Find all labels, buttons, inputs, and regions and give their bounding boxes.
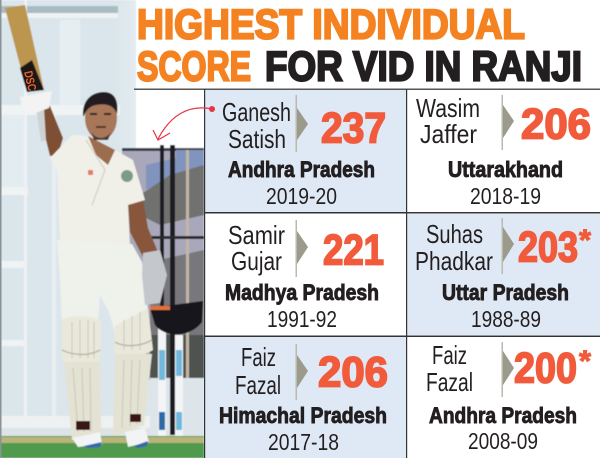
right arm	[128, 200, 158, 257]
shoes	[72, 432, 102, 447]
panel: Samir Gujar 221: Madhya Pradesh	[225, 280, 379, 305]
panel: Faiz Fazal 200*: Andhra Pradesh	[429, 403, 577, 428]
panel: Ganesh Satish 237: 237	[321, 104, 386, 152]
title: HIGHEST INDIVIDUAL	[137, 0, 525, 48]
panel: Suhas Phadkar 203*: 1988-89	[471, 306, 541, 332]
panel: Faiz Fazal 200*: 200	[514, 344, 577, 392]
panel: Ganesh Satish 237: Satish	[228, 124, 286, 154]
panel: Faiz Fazal 200*	[407, 337, 600, 458]
right glove	[142, 250, 167, 305]
panel: Ganesh Satish 237: Andhra Pradesh	[228, 157, 375, 182]
helmet	[150, 301, 203, 334]
ground	[0, 436, 204, 458]
bat	[5, 5, 44, 92]
head	[85, 96, 117, 140]
panel: Samir Gujar 221	[205, 214, 406, 335]
panel: Samir Gujar 221: Samir	[228, 220, 285, 250]
stumps	[158, 325, 166, 437]
panel: Samir Gujar 221: 221	[323, 226, 384, 274]
panel: Ganesh Satish 237: 2019-20	[266, 183, 337, 209]
panel: Suhas Phadkar 203*: Uttar Pradesh	[442, 280, 569, 305]
panel: Faiz Fazal 206: Fazal	[235, 370, 281, 400]
panel: Suhas Phadkar 203*: 203	[518, 224, 578, 272]
window	[122, 148, 204, 380]
raised arm	[44, 106, 63, 156]
panel: Samir Gujar 221: 1991-92	[267, 306, 337, 332]
panel: Wasim Jaffer 206: Jaffer	[420, 119, 477, 149]
title	[137, 0, 582, 90]
panel: Faiz Fazal 200*: *	[579, 345, 591, 378]
panel: Faiz Fazal 200*: 2008-09	[468, 428, 538, 454]
panel: Suhas Phadkar 203*: *	[579, 224, 591, 257]
bat logo: DSC	[21, 70, 39, 92]
panel: Faiz Fazal 200*: Fazal	[426, 367, 473, 397]
title: SCORE	[137, 42, 251, 90]
panel: Faiz Fazal 206: 2017-18	[268, 429, 339, 455]
panel: Suhas Phadkar 203*: Suhas	[426, 219, 483, 249]
panel: Suhas Phadkar 203*	[407, 214, 600, 335]
panel: Ganesh Satish 237	[205, 90, 406, 212]
panel: Wasim Jaffer 206	[407, 90, 600, 212]
raised glove	[20, 91, 52, 115]
photo: batsman raising his bat	[0, 0, 204, 458]
panel: Suhas Phadkar 203*: Phadkar	[415, 246, 493, 276]
panel: Faiz Fazal 200*: Faiz	[432, 340, 467, 370]
arrow: callout from name to player	[153, 106, 215, 140]
leg pads	[62, 316, 101, 364]
panel: Wasim Jaffer 206: Uttarakhand	[448, 157, 563, 182]
panel: Ganesh Satish 237: Ganesh	[222, 97, 291, 127]
panel: Faiz Fazal 206: 206	[318, 348, 388, 396]
trousers	[57, 240, 148, 332]
shirt	[50, 135, 145, 246]
panel: Faiz Fazal 206: Faiz	[241, 342, 276, 372]
panel: Wasim Jaffer 206: Wasim	[416, 93, 480, 123]
panel: Wasim Jaffer 206: 206	[521, 100, 591, 148]
panel: Samir Gujar 221: Gujar	[231, 246, 282, 276]
panel: Wasim Jaffer 206: 2018-19	[470, 183, 541, 209]
panel: Faiz Fazal 206	[205, 337, 406, 458]
panel: Faiz Fazal 206: Himachal Pradesh	[219, 403, 387, 428]
